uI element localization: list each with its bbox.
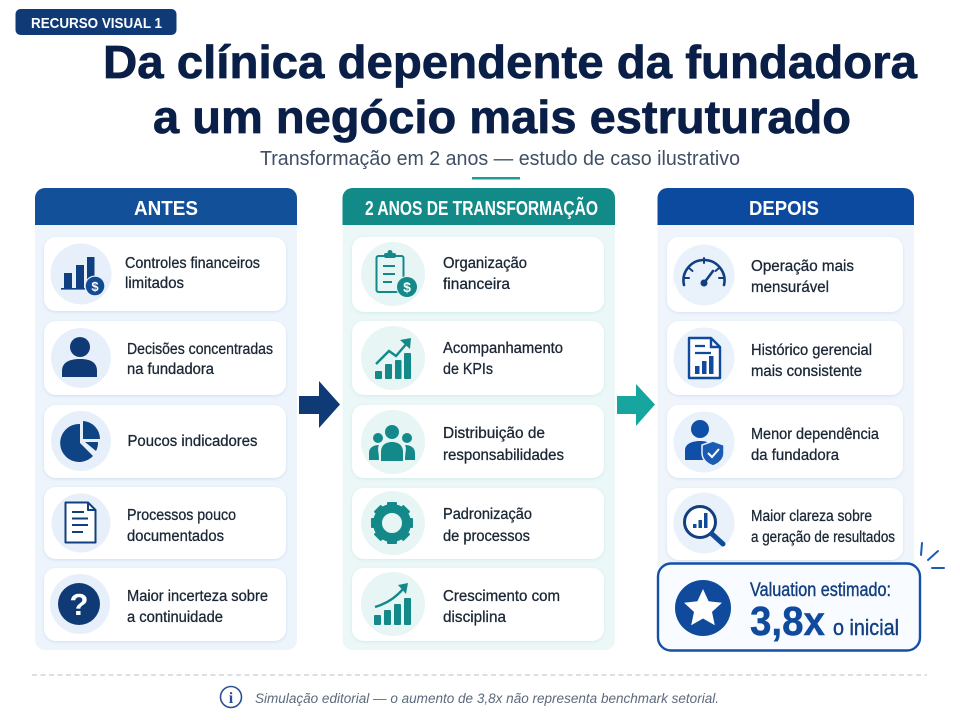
card: decisões concentradas: Decisões concentradas	[127, 341, 273, 358]
icon: bars with dollar: $	[91, 279, 99, 294]
panel: depois	[658, 188, 914, 600]
card: crescimento: Crescimento com	[443, 588, 560, 605]
card: responsabilidades: responsabilidades	[443, 447, 564, 464]
card: responsabilidades: Distribuição de	[443, 425, 545, 442]
card: kpis: Acompanhamento	[443, 340, 563, 357]
header: antes	[35, 188, 297, 225]
card: processos: documentados	[127, 528, 224, 545]
callout: valuation estimado: o inicial	[833, 615, 899, 640]
card: poucos indicadores: Poucos indicadores	[128, 433, 258, 450]
icon: pie chart	[60, 421, 100, 462]
card: operação	[667, 237, 903, 312]
card: padronização	[352, 488, 604, 559]
icon: magnifier	[684, 506, 723, 544]
card: controles financeiros: Controles financeiros	[125, 255, 260, 272]
card: dependência	[667, 405, 903, 478]
card: incerteza	[44, 568, 286, 641]
card: operação: Operação mais	[751, 258, 854, 275]
card: incerteza: Maior incerteza sobre	[127, 588, 268, 605]
icon: sparkle accents	[921, 543, 944, 568]
icon: document	[66, 502, 96, 542]
icon: bars with dollar	[61, 257, 106, 296]
panel: 2 anos de transformação	[342, 188, 615, 650]
callout: valuation estimado: Valuation estimado:	[750, 580, 891, 601]
footnote: Simulação editorial — o aumento de 3,8x não representa benchmark setorial.	[255, 691, 719, 706]
card: controles financeiros: limitados	[125, 275, 184, 292]
callout: valuation estimado	[658, 564, 920, 650]
icon: clipboard with dollar: $	[403, 279, 411, 295]
icon: gauge	[684, 258, 724, 286]
card: poucos indicadores	[44, 405, 286, 478]
card: decisões concentradas	[44, 321, 286, 395]
card: operação: mensurável	[751, 279, 829, 296]
card: dependência: Menor dependência	[751, 426, 879, 443]
card: histórico: Histórico gerencial	[751, 342, 872, 359]
arrow: transformação to depois	[617, 384, 655, 426]
callout: valuation estimado: 3,8x	[750, 598, 825, 644]
card: controles financeiros	[44, 237, 286, 311]
title: a um negócio mais estruturado	[153, 91, 851, 143]
card: organização financeira	[352, 237, 604, 312]
subtitle: Transformação em 2 anos — estudo de caso ilustrativo	[260, 148, 740, 170]
icon: person with shield	[685, 420, 724, 466]
header: depois	[658, 188, 914, 225]
card: dependência: da fundadora	[751, 447, 839, 464]
badge: recurso visual	[16, 9, 176, 35]
header: depois: DEPOIS	[749, 197, 819, 220]
card: incerteza: a continuidade	[127, 609, 223, 626]
icon: team	[369, 425, 415, 461]
card: clareza	[667, 488, 903, 560]
icon: info: i	[229, 690, 234, 707]
icon: growth bars	[374, 583, 411, 625]
divider	[32, 674, 927, 676]
subtitle accent	[472, 177, 520, 180]
icon: question mark	[58, 583, 100, 625]
header: antes: ANTES	[134, 197, 198, 220]
icon: report document	[689, 338, 720, 378]
card: padronização: de processos	[443, 528, 530, 545]
card: crescimento: disciplina	[443, 609, 506, 626]
card: decisões concentradas: na fundadora	[127, 361, 214, 378]
card: histórico	[667, 321, 903, 395]
card: kpis	[352, 321, 604, 395]
card: clareza: Maior clareza sobre	[751, 508, 872, 525]
icon: question mark: ?	[70, 587, 88, 622]
card: clareza: a geração de resultados	[751, 529, 895, 546]
title	[103, 36, 917, 143]
card: padronização: Padronização	[443, 506, 532, 523]
title: Da clínica dependente da fundadora	[103, 36, 917, 88]
card: kpis: de KPIs	[443, 361, 493, 378]
header: transformação	[342, 188, 615, 225]
icon: gear	[371, 502, 413, 544]
icon: person	[62, 337, 97, 377]
panel: antes	[35, 188, 297, 650]
card: responsabilidades	[352, 405, 604, 478]
card: processos	[44, 487, 286, 559]
card: crescimento	[352, 568, 604, 641]
card: organização financeira: financeira	[443, 276, 510, 293]
icon: rising chart	[375, 338, 411, 379]
icon: clipboard with dollar	[376, 250, 418, 298]
icon: star badge	[675, 580, 731, 636]
icon: info	[220, 686, 242, 708]
card: histórico: mais consistente	[751, 363, 862, 380]
badge: recurso visual: RECURSO VISUAL 1	[31, 15, 162, 32]
header: transformação: 2 ANOS DE TRANSFORMAÇÃO	[365, 197, 598, 220]
card: organização financeira: Organização	[443, 255, 527, 272]
card: processos: Processos pouco	[127, 507, 236, 524]
arrow: antes to transformação	[299, 381, 340, 428]
